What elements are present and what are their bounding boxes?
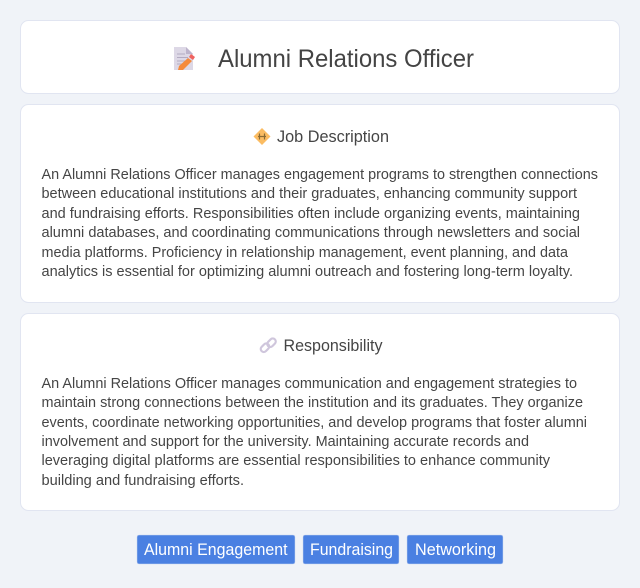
text block: job description: and fundraising efforts. Responsibilities often include organizing events, maintaining (42, 206, 580, 222)
heading: job description: Job Description (277, 128, 389, 146)
icon: document with pencil (174, 47, 195, 70)
panel: job description (20, 104, 620, 302)
heading: responsibility: Responsibility (284, 337, 383, 355)
text block: responsibility (42, 376, 587, 489)
icon: chain link (260, 337, 277, 353)
text block: job description: alumni databases, and coordinating communications through newsletters and social (42, 225, 580, 241)
icon: diamond road sign (254, 128, 270, 145)
text block: job description: An Alumni Relations Officer manages engagement programs to strengthen connections (42, 167, 598, 183)
panel: title card (20, 20, 620, 94)
tag: Fundraising (303, 535, 399, 564)
tag: Networking: Networking (415, 541, 496, 559)
tag: Alumni Engagement (137, 535, 295, 564)
text block: job description: analytics is essential for optimizing alumni outreach and fostering long-term loyalty. (42, 264, 573, 280)
panel: responsibility (20, 314, 620, 510)
tag: Fundraising: Fundraising (310, 541, 393, 559)
text block: job description: media platforms. Proficiency in relationship management, event planning, and data (42, 245, 569, 261)
text block: responsibility: maintain strong connections between the institution and its graduates. They organize (42, 395, 583, 411)
text block: responsibility: An Alumni Relations Officer manages communication and engagement strategies to (42, 376, 577, 392)
text block: job description: between educational institutions and their graduates, enhancing community support (42, 186, 577, 202)
text block: job description (42, 167, 598, 280)
tag: Networking (407, 535, 503, 564)
tag: Alumni Engagement: Alumni Engagement (144, 541, 288, 559)
text block: responsibility: leveraging digital platforms are essential responsibilities to enhance community (42, 453, 551, 469)
text block: responsibility: building and fundraising efforts. (42, 473, 244, 489)
text block: responsibility: involvement and support for the university. Maintaining accurate records and (42, 434, 529, 450)
title: Alumni Relations Officer (218, 45, 474, 73)
text block: responsibility: events, coordinate networking opportunities, and develop programs that foster alumni (42, 415, 587, 431)
